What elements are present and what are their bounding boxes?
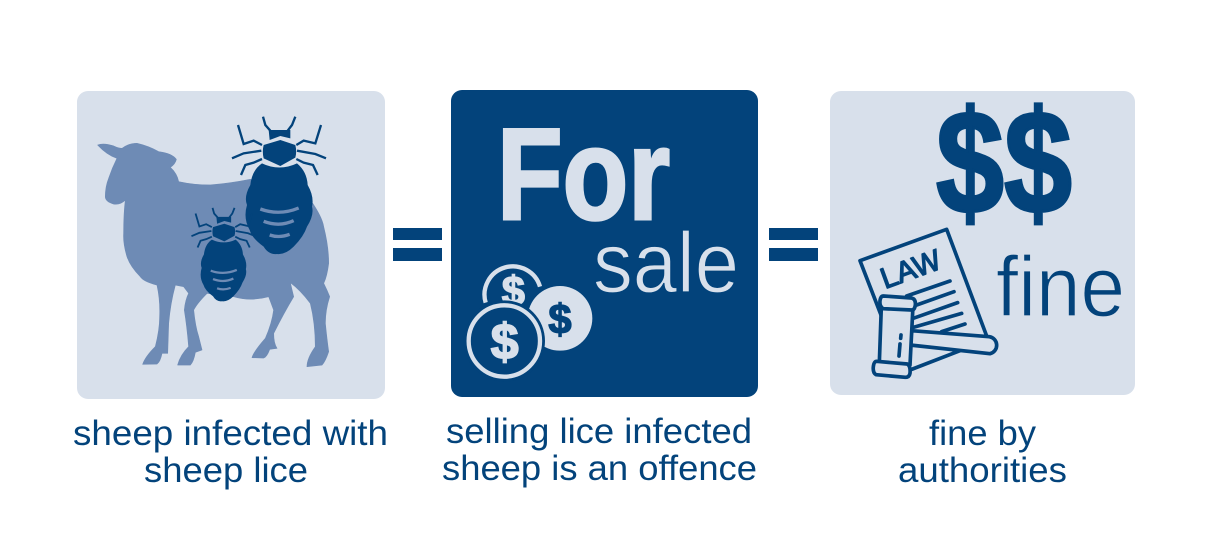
caption: selling offence: sheep is an offence	[442, 449, 757, 488]
panel: infected sheep	[77, 91, 385, 399]
icon: sheep silhouette with lice	[98, 117, 330, 367]
icon: coins	[464, 266, 592, 382]
icon: coins: $	[502, 267, 525, 314]
icon: law document and gavel	[860, 229, 997, 377]
caption: sheep infected: sheep lice	[144, 451, 308, 490]
icon: small louse	[191, 208, 255, 301]
heading: For: For	[497, 101, 670, 247]
icon: law document and gavel: LAW	[876, 243, 946, 296]
text: fine: fine	[996, 240, 1125, 335]
panel: fine	[830, 81, 1135, 395]
heading: dollar signs: $$	[936, 81, 1072, 245]
caption: fine by authorities: authorities	[898, 451, 1067, 490]
caption: selling offence	[442, 412, 757, 488]
caption: sheep infected: sheep infected with	[73, 414, 388, 453]
caption: selling offence: selling lice infected	[446, 412, 752, 451]
caption: fine by authorities: fine by	[929, 414, 1037, 453]
icon: sheep	[98, 143, 330, 367]
panel: for sale	[451, 90, 758, 397]
icon: large louse	[232, 117, 326, 254]
text: sale: sale	[593, 216, 739, 311]
caption: fine by authorities	[898, 414, 1067, 490]
icon: coins: $	[491, 314, 519, 370]
icon: equals sign right	[769, 228, 818, 261]
icon: equals sign left	[393, 228, 442, 261]
caption: sheep infected	[73, 414, 388, 490]
icon: coins: $	[548, 295, 572, 342]
